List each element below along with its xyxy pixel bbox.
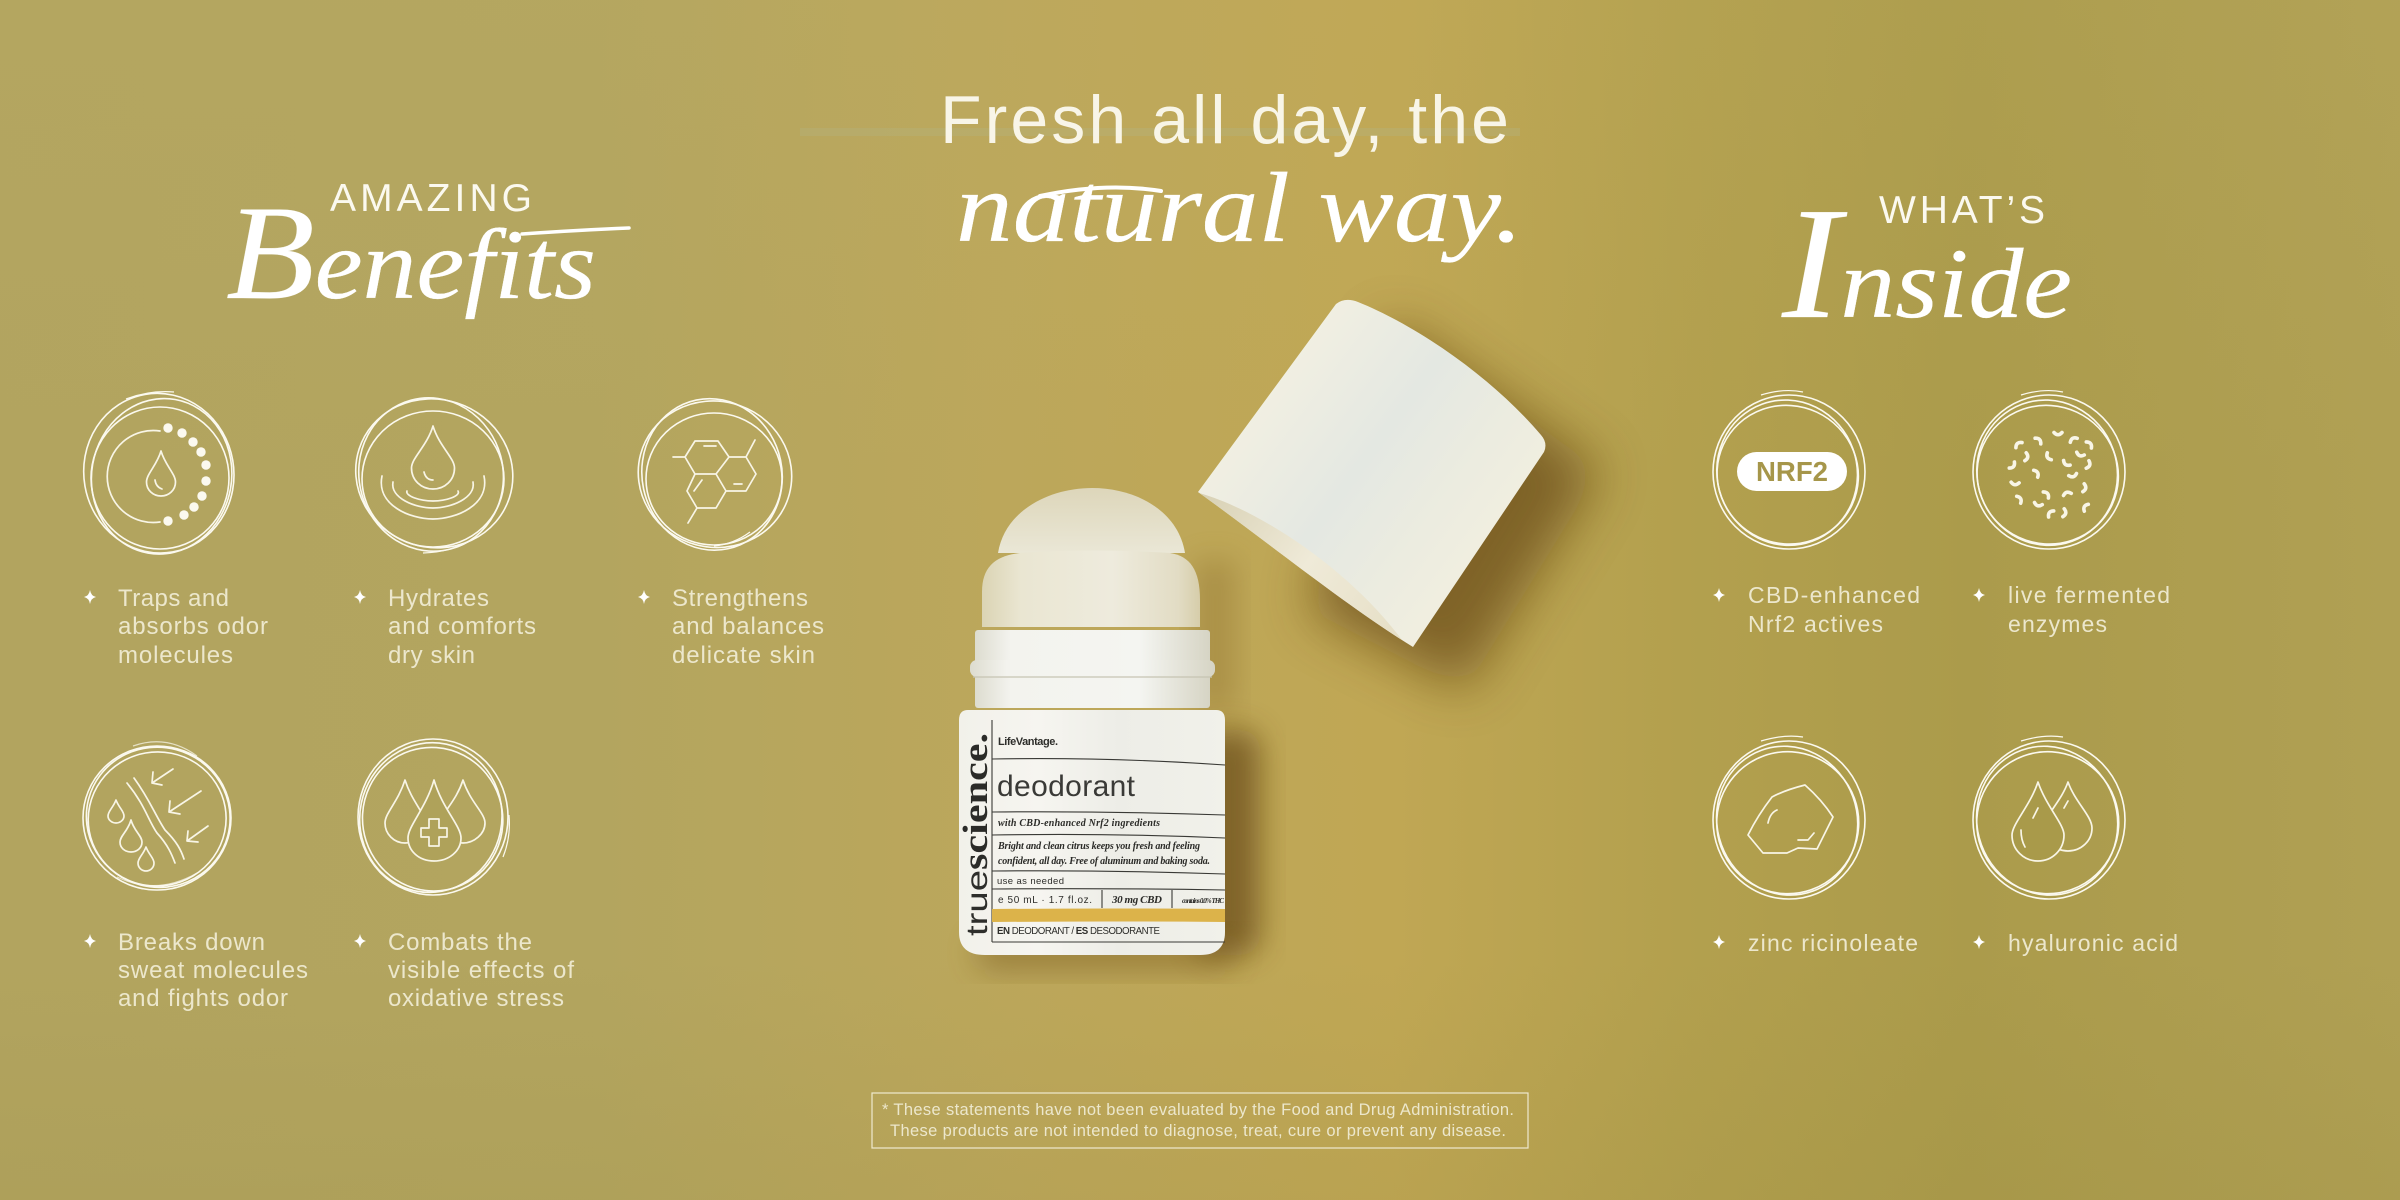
bottle body and label: confident, all day. Free of aluminum and baking soda.: [998, 856, 1210, 867]
brand: truescience: [956, 733, 995, 936]
bottle body and label: EN DEODORANT / ES DESODORANTE: [997, 926, 1161, 937]
ingredient: nrf2: [1694, 380, 1920, 637]
text: breaks down sweat molecules and fights odor: Breaks down: [118, 929, 265, 956]
main title: natural way.: [956, 152, 1523, 263]
benefit: combats oxidative stress: [344, 729, 574, 1012]
icon: two drops: [1953, 726, 2142, 917]
text: cbd-enhanced nrf2 actives: [1713, 582, 1920, 637]
ingredient: live fermented enzymes: [1954, 380, 2170, 637]
text: breaks down sweat molecules and fights odor: and fights odor: [118, 985, 288, 1012]
neck with thread: [970, 630, 1215, 708]
panel: benefits: [71, 379, 824, 1012]
text: live fermented enzymes: live fermented: [2008, 582, 2170, 608]
text: traps and absorbs odor molecules: Traps and: [118, 585, 229, 612]
disclaimer box: These products are not intended to diagnose, treat, cure or prevent any disease.: [890, 1122, 1506, 1140]
ingredient: hyaluronic acid: [1953, 726, 2178, 956]
text: strengthens and balances delicate skin: Strengthens: [672, 585, 808, 612]
text: combats the visible effects of oxidative stress: [354, 929, 574, 1012]
disclaimer box: * These statements have not been evaluated by the Food and Drug Administration.: [882, 1101, 1514, 1119]
text: cbd-enhanced nrf2 actives: CBD-enhanced: [1748, 582, 1920, 608]
text: strengthens and balances delicate skin: delicate skin: [672, 642, 815, 669]
icon: sweat drops and arrows: [71, 731, 246, 904]
benefit: strengthens and balances: [622, 384, 824, 669]
heading: amazing benefits: Benefits: [226, 179, 596, 328]
icon: drops with cross: [344, 729, 521, 909]
text: combats the visible effects of oxidative stress: visible effects of: [388, 957, 574, 984]
product: cap: [1198, 300, 1545, 647]
icon: enzymes: [1954, 380, 2141, 567]
text: strengthens and balances delicate skin: [638, 585, 824, 669]
bottle body and label: [956, 710, 1225, 955]
text: combats the visible effects of oxidative stress: oxidative stress: [388, 985, 564, 1012]
disclaimer box: [872, 1093, 1528, 1148]
icon: drop with ripples: [336, 379, 532, 568]
bottle body and label: use as needed: [997, 876, 1064, 887]
heading: what's inside: WHAT’S: [1879, 189, 2045, 232]
benefit: hydrates and comforts: [336, 379, 536, 669]
product: bottle: [956, 488, 1225, 955]
heading: amazing benefits: AMAZING: [330, 177, 532, 220]
icon: nrf2 pill: [1694, 380, 1881, 567]
benefit: breaks down sweat: [71, 731, 308, 1012]
bottle body and label: deodorant: [997, 770, 1136, 803]
bottle body and label: Bright and clean citrus keeps you fresh and feeling: [997, 841, 1200, 852]
icon: drop with dotted ring: [71, 381, 247, 565]
main title: Fresh all day, the: [940, 82, 1509, 158]
main title: [940, 82, 1523, 263]
text: hydrates and comforts dry skin: [354, 585, 536, 669]
cap interior: [1198, 492, 1413, 647]
text: live fermented enzymes: [1973, 582, 2170, 637]
ingredient: zinc ricinoleate: [1693, 726, 1918, 956]
text: hydrates and comforts dry skin: dry skin: [388, 642, 475, 669]
text: strengthens and balances delicate skin: and balances: [672, 613, 824, 640]
text: live fermented enzymes: enzymes: [2008, 611, 2107, 637]
text: hydrates and comforts dry skin: Hydrates: [388, 585, 489, 612]
text: breaks down sweat molecules and fights odor: [84, 929, 308, 1012]
bottle body and label: contains 0.0% THC: [1182, 897, 1224, 905]
icon: zinc rock: [1693, 726, 1882, 917]
bottle body and label: LifeVantage.: [998, 736, 1058, 748]
icon: nrf2 pill: NRF2: [1756, 456, 1828, 487]
bottle body and label: with CBD-enhanced Nrf2 ingredients: [998, 818, 1160, 829]
translucent collar: [982, 550, 1200, 627]
benefit: traps and absorbs odor: [71, 381, 268, 669]
shadows under product: [975, 320, 1600, 970]
text: traps and absorbs odor molecules: absorbs odor: [118, 613, 268, 640]
text: hydrates and comforts dry skin: and comforts: [388, 613, 536, 640]
text: hyaluronic acid: hyaluronic acid: [2008, 930, 2178, 956]
heading: what's inside: Inside: [1781, 174, 2072, 352]
brand: truescience: true: [961, 870, 994, 936]
text: zinc ricinoleate: zinc ricinoleate: [1748, 930, 1918, 956]
text: breaks down sweat molecules and fights odor: sweat molecules: [118, 957, 308, 984]
bottle body and label: e 50 mL · 1.7 fl.oz.: [998, 895, 1092, 906]
bottle body and label: 30 mg CBD: [1111, 894, 1162, 906]
icon: molecule hexagons: [622, 384, 808, 565]
text: traps and absorbs odor molecules: [84, 585, 268, 669]
text: traps and absorbs odor molecules: molecules: [118, 642, 233, 669]
text: cbd-enhanced nrf2 actives: Nrf2 actives: [1748, 611, 1883, 637]
text: combats the visible effects of oxidative stress: Combats the: [388, 929, 532, 956]
brand: truescience: science.: [956, 733, 995, 870]
roller ball: [998, 488, 1185, 553]
panel: what's inside: [1693, 380, 2178, 956]
